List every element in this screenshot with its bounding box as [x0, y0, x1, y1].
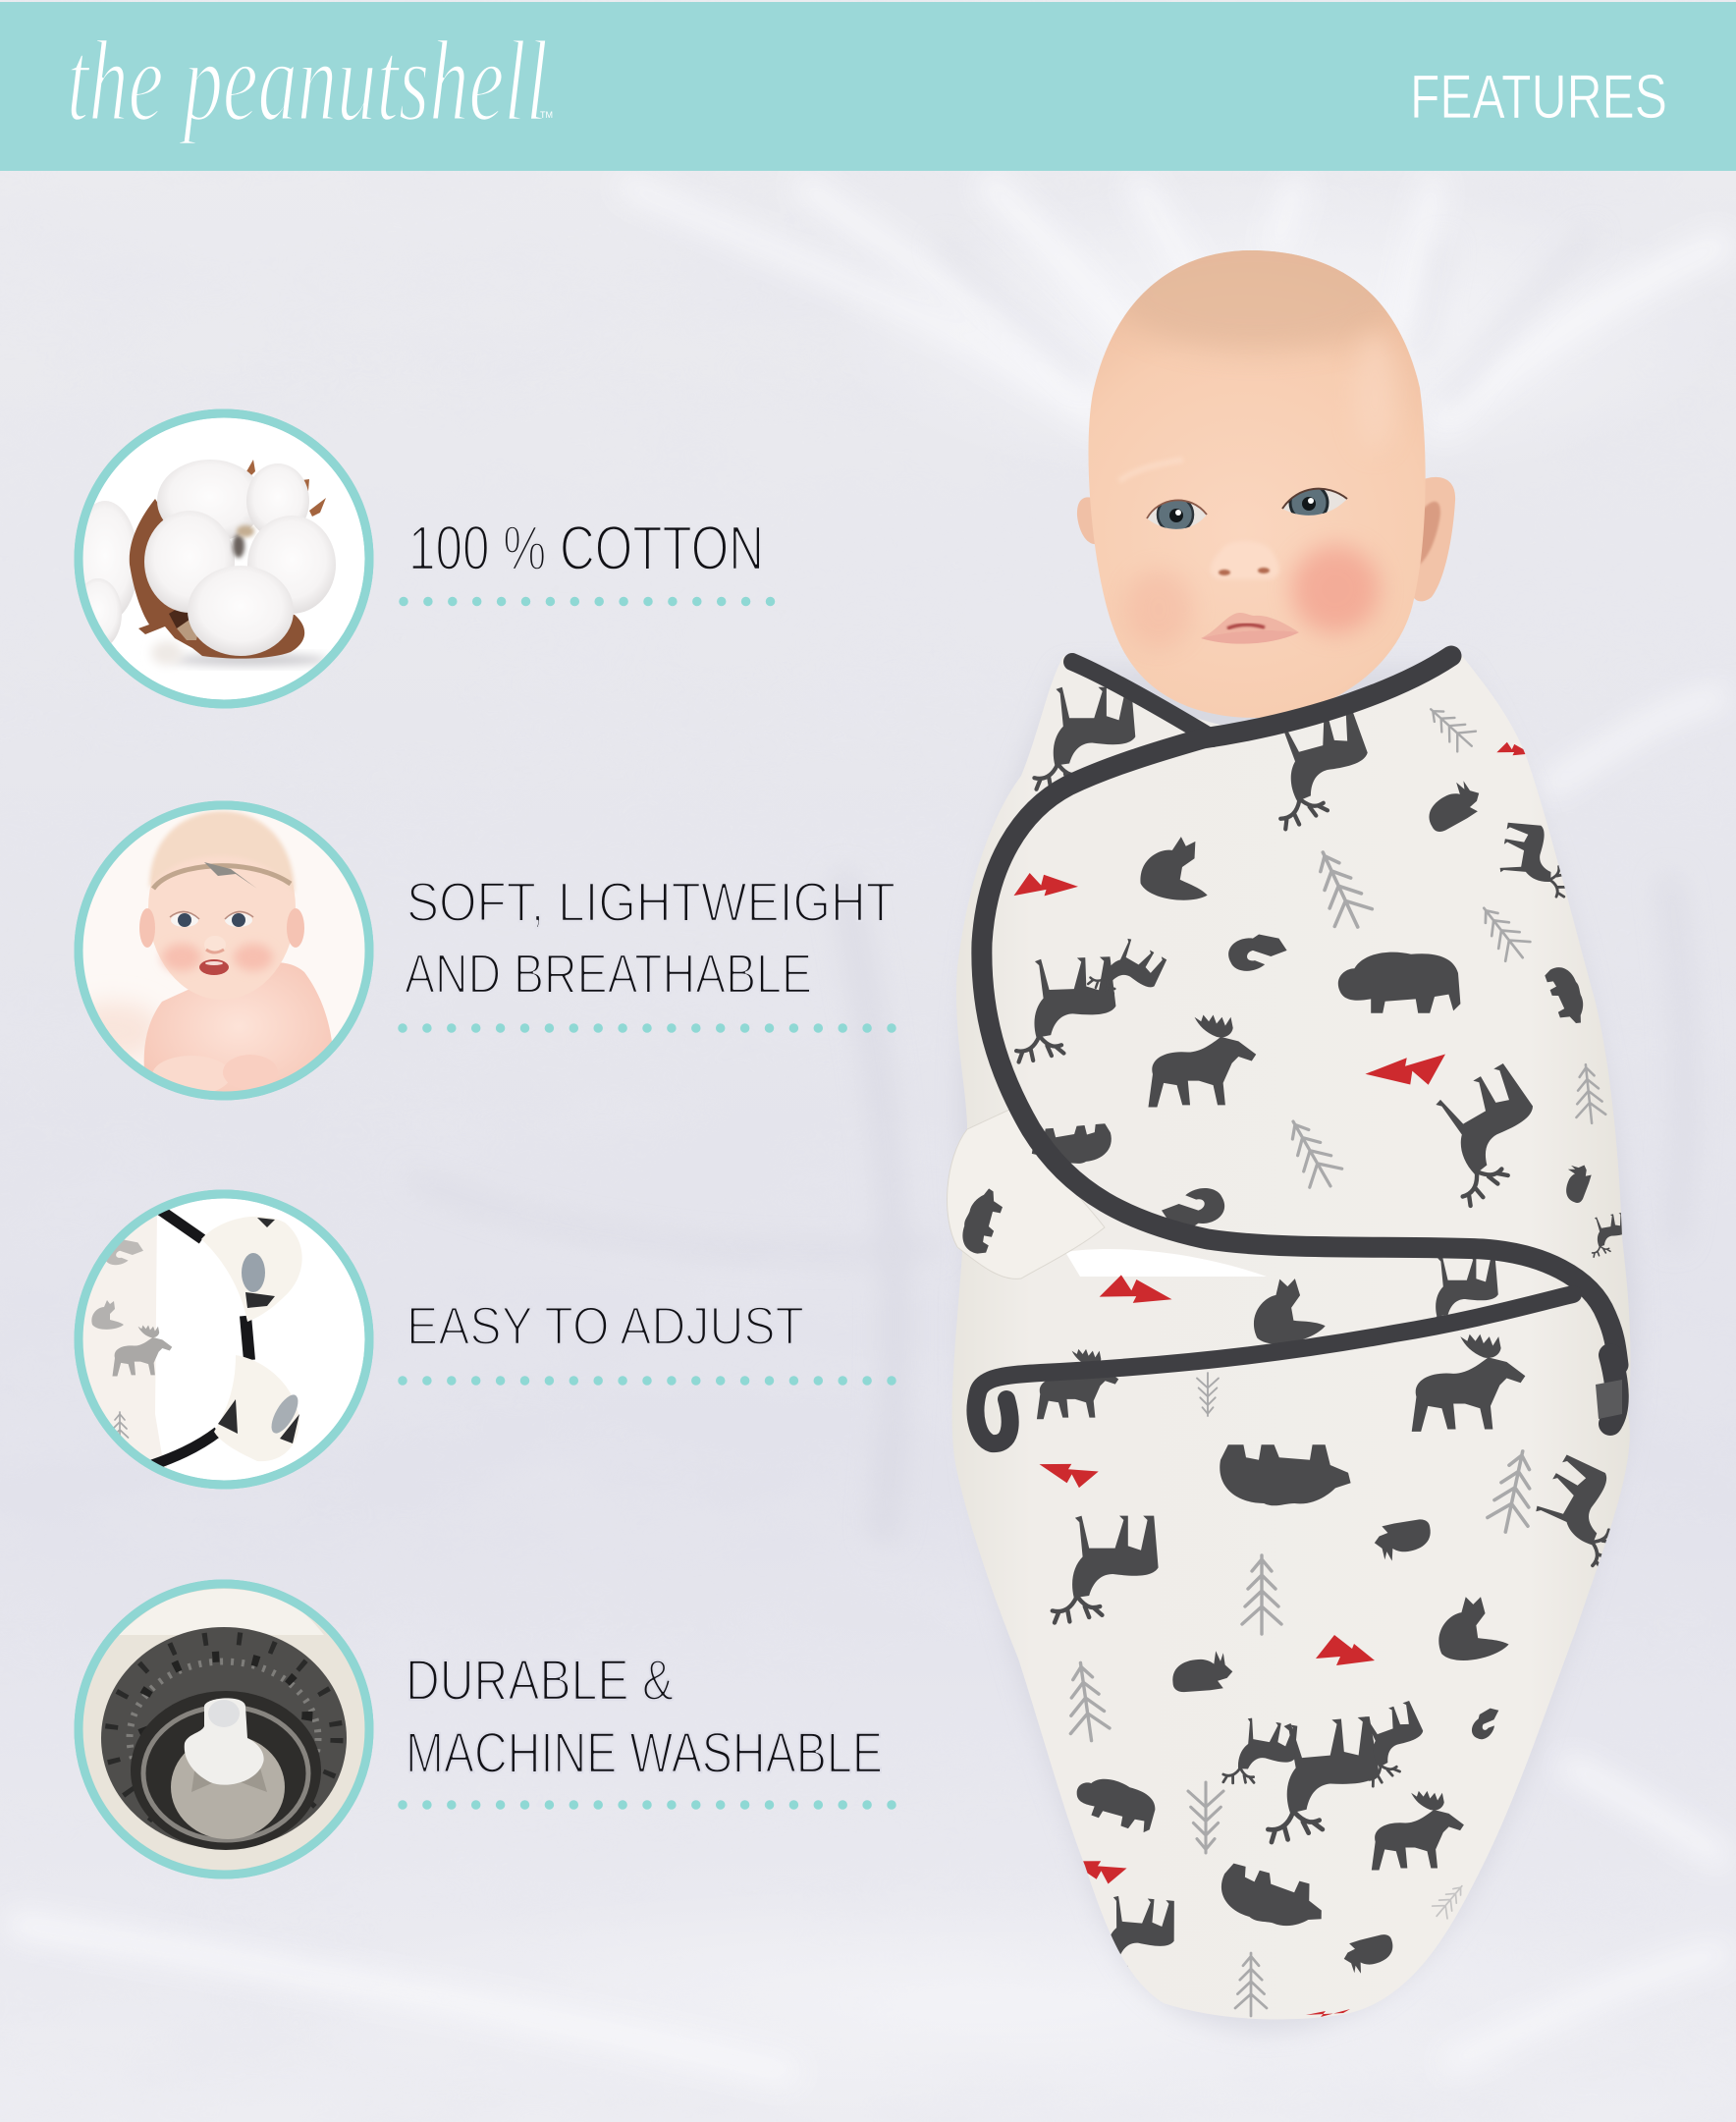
right eye [1282, 484, 1347, 521]
nose [1211, 541, 1279, 579]
velcro flap [948, 1110, 1105, 1279]
feature: soft, lightweight and breathable [64, 801, 895, 1105]
feature: durable and machine washable [75, 1580, 895, 1878]
photo: washing machine drum [75, 1580, 373, 1878]
dotted divider [404, 597, 776, 606]
print pattern: animals, trees and red bolts [955, 687, 1645, 2016]
dotted divider [403, 1800, 895, 1810]
label: durable and machine washable: DURABLE & [406, 1649, 674, 1713]
dotted divider [403, 1023, 895, 1033]
baby head [1077, 229, 1455, 718]
swaddle wrap [948, 653, 1645, 2019]
dotted divider [403, 1376, 895, 1386]
label: durable and machine washable: MACHINE WASHABLE [406, 1721, 883, 1785]
photo: smiling baby [64, 801, 373, 1105]
feature: 100% cotton [72, 413, 776, 704]
label: 100 % cotton: 100 % COTTON [408, 513, 764, 583]
label: soft, lightweight and breathable: AND BREATHABLE [405, 943, 812, 1006]
label: soft, lightweight and breathable [405, 871, 895, 1006]
logo: the peanutshell: the peanutshell [67, 17, 548, 145]
swaddle shadow [960, 668, 1636, 2033]
left eye [1119, 460, 1207, 532]
logo: the peanutshell: TM [540, 110, 553, 120]
label: durable and machine washable [406, 1649, 883, 1785]
white liner under flap [1065, 1249, 1267, 1277]
dark binding [976, 656, 1618, 1443]
logo: the peanutshell [67, 17, 553, 145]
header bar [0, 2, 1736, 171]
mouth [1201, 613, 1299, 644]
photo: open swaddle with velcro flaps [75, 1190, 369, 1489]
cheeks [1291, 545, 1380, 633]
red hem at foot [1306, 2009, 1350, 2017]
label: easy to adjust: EASY TO ADJUST [407, 1295, 804, 1356]
feature: easy to adjust [75, 1190, 895, 1489]
photo: swaddled newborn [948, 229, 1645, 2033]
photo: cotton boll [72, 413, 369, 704]
heading: FEATURES: FEATURES [1410, 63, 1667, 132]
label: soft, lightweight and breathable: SOFT, LIGHTWEIGHT [407, 871, 895, 934]
